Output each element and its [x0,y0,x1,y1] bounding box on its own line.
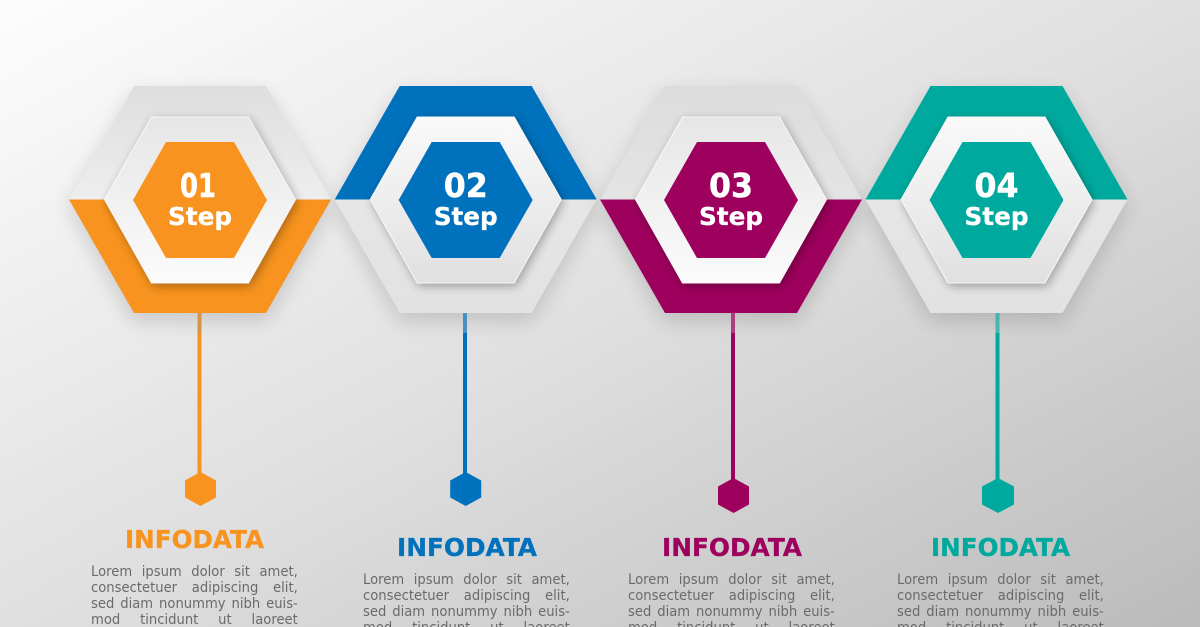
step 1 body text: Lorem ipsum dolor sit amet, [91,564,298,580]
step 2 body text: Lorem ipsum dolor sit amet, [363,572,570,588]
step 2 connector line [463,313,467,475]
inner hexagon [399,142,533,258]
step 1 heading: INFODATA [125,525,265,554]
grey lower half [866,200,1128,313]
step 2 small hexagon [450,472,481,506]
step 2 body text: sed diam nonummy nibh euis- [363,604,570,620]
step 3 body text [628,572,835,627]
middle ring [636,117,826,283]
step 4 body text [897,572,1104,627]
step label: Step [699,202,763,231]
blue upper half [335,86,597,200]
grey upper half [600,86,862,200]
step 4 body text: sed diam nonummy nibh euis- [897,604,1104,620]
middle ring [370,117,561,283]
step 3 body text: Lorem ipsum dolor sit amet, [628,572,835,588]
orange lower half [69,200,331,313]
step 1 body text: consectetuer adipiscing elit, [91,580,298,596]
magenta lower half [600,200,862,313]
step 1 small hexagon [185,472,216,506]
step 3 connector line [731,313,735,481]
step 4 body text: Lorem ipsum dolor sit amet, [897,572,1104,588]
step 3 body text: sed diam nonummy nibh euis- [628,604,835,620]
step label: Step [434,202,498,231]
step 1 connector line [198,313,202,475]
inner hexagon [133,142,267,258]
step 4 small hexagon [982,478,1014,513]
grey lower half [335,200,597,313]
step 4 heading: INFODATA [931,533,1071,562]
inner hexagon [664,142,798,258]
step 1 body text [91,564,298,627]
step 2 body text: consectetuer adipiscing elit, [363,588,570,604]
step 3 body text: consectetuer adipiscing elit, [628,588,835,604]
teal upper half [866,86,1128,200]
step 1 hexagon [69,86,331,321]
middle ring [104,117,296,283]
step number: 01 [180,166,216,205]
step 3 heading: INFODATA [662,533,803,562]
step label: Step [964,202,1028,231]
step label: Step [168,202,232,231]
middle ring [901,117,1092,283]
step 2 heading: INFODATA [397,533,538,562]
step 4 body text: consectetuer adipiscing elit, [897,588,1104,604]
step number: 03 [709,166,753,205]
grey upper half [69,86,331,200]
step 2 hexagon [335,86,597,321]
step number: 04 [974,166,1018,205]
step 1 body text: sed diam nonummy nibh euis- [91,596,298,612]
step 3 hexagon [600,86,862,321]
step 3 small hexagon [718,478,749,513]
step number: 02 [444,166,488,205]
step 4 connector line [996,313,1000,481]
step 2 body text [363,572,570,627]
inner hexagon [930,142,1064,258]
step 4 hexagon [866,86,1128,321]
